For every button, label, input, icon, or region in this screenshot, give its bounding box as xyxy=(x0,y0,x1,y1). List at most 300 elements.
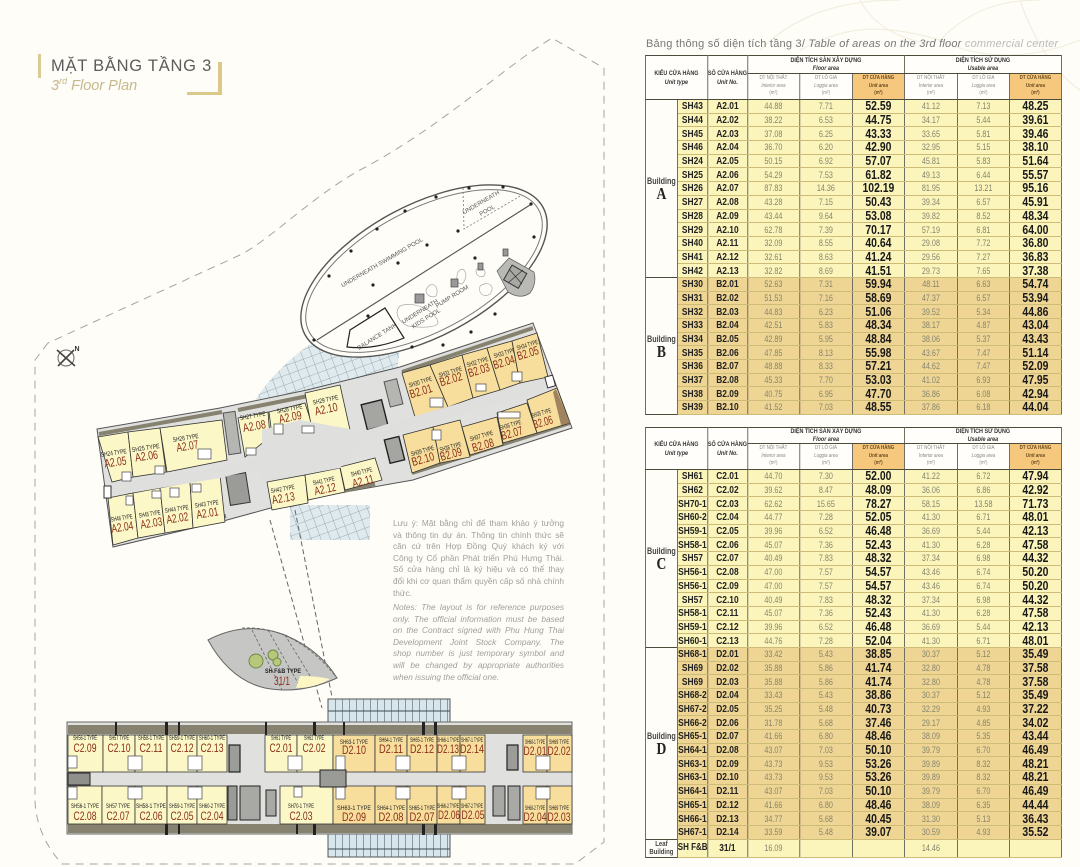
building B rows: 8.33 xyxy=(819,361,833,371)
building D rows: D2.11 xyxy=(716,785,738,797)
building A rows: 44.88 xyxy=(764,101,782,111)
building D rows: D2.10 xyxy=(716,771,739,783)
unit C2.10: SH57 TYPE xyxy=(109,735,129,742)
wing lobby xyxy=(262,420,362,482)
building D rows: 8.32 xyxy=(976,772,990,782)
building D rows: 5.68 xyxy=(819,814,833,824)
building B rows: SH32 xyxy=(682,306,703,318)
building A rows: 5.44 xyxy=(976,115,990,125)
building D rows: 34.77 xyxy=(764,814,782,824)
building B rows: 7.03 xyxy=(819,402,833,412)
building C rows: 6.52 xyxy=(819,526,833,536)
unit C2.12: SH59-1 TYPE xyxy=(169,735,195,742)
note text Vietnamese: Lưu ý: Mặt bằng chỉ để tham khảo ý tưởng xyxy=(393,518,564,528)
building B rows: 4.87 xyxy=(976,320,990,330)
unit D2.02: SH69 TYPE xyxy=(549,739,569,746)
building B rows: B2.06 xyxy=(716,347,739,359)
building A rows: 32.61 xyxy=(764,252,782,262)
unit A2.05 xyxy=(98,432,133,482)
building D rows: 7.03 xyxy=(819,786,833,796)
building D rows xyxy=(645,647,1061,839)
unit A2.04: A2.04 xyxy=(110,518,135,536)
building C rows: 58.15 xyxy=(922,499,940,509)
table header: Unit No. xyxy=(717,450,738,456)
table header: Loggia area xyxy=(972,83,995,89)
building B rows: 5.95 xyxy=(819,334,833,344)
building D rows: 5.48 xyxy=(819,827,833,837)
building D rows: SH65-1 xyxy=(678,799,707,811)
unit C2.05 xyxy=(167,786,197,824)
building C rows: 6.71 xyxy=(976,512,990,522)
unit A2.13: A2.13 xyxy=(271,489,296,507)
unit D2.08: D2.08 xyxy=(378,810,404,824)
note text English: on the Contract signed with Phu Hung Thai xyxy=(393,625,564,635)
building C rows: 7.83 xyxy=(819,595,833,605)
building C rows: 40.49 xyxy=(764,553,782,563)
unit C2.04: SH60-2 TYPE xyxy=(199,803,225,810)
compass icon: N xyxy=(74,346,80,353)
unit B2.03: SH32 TYPE xyxy=(466,356,489,369)
building D rows: D2.08 xyxy=(716,744,739,756)
building D rows: 5.12 xyxy=(976,690,990,700)
building A rows: SH43 xyxy=(682,100,703,112)
unit C2.08 xyxy=(68,786,102,824)
building B rows: B2.02 xyxy=(716,292,739,304)
building C rows: 40.49 xyxy=(764,595,782,605)
unit B2.04 xyxy=(487,341,520,390)
building D rows: 5.13 xyxy=(976,814,990,824)
building B rows: 36.86 xyxy=(922,389,940,399)
building A rows: 6.44 xyxy=(976,170,990,180)
unit D2.09: D2.09 xyxy=(342,810,366,824)
building C rows: C2.08 xyxy=(716,566,739,578)
leaf building row: Leaf Building xyxy=(649,839,673,856)
building D rows: 30.37 xyxy=(922,649,940,659)
building D rows: D2.01 xyxy=(716,648,739,660)
building C rows: 39.62 xyxy=(764,485,782,495)
building C rows: 13.58 xyxy=(974,499,992,509)
table header: Unit area xyxy=(1026,83,1045,89)
building B rows: SH39 xyxy=(682,401,703,413)
building D rows: 5.48 xyxy=(819,704,833,714)
building D rows: D2.06 xyxy=(716,717,739,729)
building D rows: D2.09 xyxy=(716,758,739,770)
wet rooms xyxy=(68,756,550,799)
unit D2.09 xyxy=(333,786,375,824)
unit C2.12: C2.12 xyxy=(170,741,194,755)
building D rows: D2.05 xyxy=(716,703,739,715)
unit B2.07: SH36 TYPE xyxy=(499,419,523,432)
building C rows: C2.01 xyxy=(716,470,739,482)
table header: Usable area xyxy=(968,64,998,72)
building B rows: B xyxy=(657,342,666,361)
building B rows: 45.33 xyxy=(764,375,782,385)
building B rows: 6.95 xyxy=(819,389,833,399)
unit D2.11: D2.11 xyxy=(379,742,403,756)
building A rows: 39.82 xyxy=(922,211,940,221)
building A rows: 7.27 xyxy=(976,252,990,262)
building A rows: SH27 xyxy=(682,196,703,208)
note text English: shop number is just temporary symbol and xyxy=(393,648,564,658)
table header xyxy=(654,428,1061,469)
building B rows: 6.23 xyxy=(819,307,833,317)
unit D2.06: D2.06 xyxy=(438,808,460,822)
unit D2.06 xyxy=(437,786,460,824)
building C rows: SH56-1 xyxy=(678,566,707,578)
unit A2.01 xyxy=(190,475,225,528)
title bracket left xyxy=(38,54,41,78)
building C rows: C2.06 xyxy=(716,539,739,551)
building B rows: B2.04 xyxy=(716,319,739,331)
building A rows: SH28 xyxy=(682,210,703,222)
building A rows: A2.03 xyxy=(716,128,739,140)
table header: DT CỬA HÀNG (m²) xyxy=(863,75,894,96)
building D rows: SH65-1 xyxy=(678,730,707,742)
building A rows: SH26 xyxy=(682,182,703,194)
unit A2.09 xyxy=(269,403,313,435)
building D rows: 39.79 xyxy=(922,786,940,796)
building C rows: 8.47 xyxy=(819,485,833,495)
unit D2.01: D2.01 xyxy=(524,744,547,758)
table header: Unit area xyxy=(1026,453,1045,459)
unit D2.10: D2.10 xyxy=(342,743,366,757)
unit D2.11: SH64-1 TYPE xyxy=(379,737,403,744)
wet rooms xyxy=(122,372,522,505)
building C rows: 36.69 xyxy=(922,622,940,632)
building D rows: D2.03 xyxy=(716,676,739,688)
building B rows: 7.47 xyxy=(976,348,990,358)
building C rows: 43.46 xyxy=(922,581,940,591)
building A rows: 39.34 xyxy=(922,197,940,207)
building A rows: 5.81 xyxy=(976,129,990,139)
table header: Unit area xyxy=(869,83,888,89)
unit B2.02: B2.02 xyxy=(438,369,464,389)
table heading: Bảng thông số diện tích tầng 3/ Table of areas on the 3rd floor commercial center xyxy=(646,38,1058,50)
unit D2.01 xyxy=(523,735,547,772)
building D rows: D2.07 xyxy=(716,730,739,742)
unit A2.02: A2.02 xyxy=(165,509,190,527)
building C rows: C2.11 xyxy=(716,607,738,619)
building C rows: C2.09 xyxy=(716,580,739,592)
unit D2.14 xyxy=(460,735,485,772)
unit A2.09: A2.09 xyxy=(278,408,303,426)
building C rows: SH59-1 xyxy=(678,525,707,537)
building D rows: Building xyxy=(647,731,676,741)
table header: Loggia area xyxy=(814,83,838,89)
balance tank xyxy=(347,308,404,348)
unit D2.14: SH67-1 TYPE xyxy=(461,737,483,744)
building C rows: 6.72 xyxy=(976,471,990,481)
unit C2.01: SH61 TYPE xyxy=(271,735,291,742)
leaf building row: 16.09 xyxy=(764,843,782,853)
building D rows: SH63-1 xyxy=(678,771,707,783)
building B rows: 37.86 xyxy=(922,402,940,412)
unit A2.07: SH26 TYPE xyxy=(172,433,200,444)
leaf F&B building xyxy=(208,628,337,690)
note text Vietnamese: và thông tin dự án. Thông tin chính thức sẽ xyxy=(393,530,564,540)
unit B2.01: B2.01 xyxy=(408,381,434,401)
unit C2.09: SH56-1 TYPE xyxy=(73,735,97,742)
building B rows: 7.47 xyxy=(976,361,990,371)
table: buildings C, D and leaf xyxy=(645,427,1062,858)
unit A2.10: A2.10 xyxy=(313,400,339,418)
table header: Unit area xyxy=(869,453,888,459)
building A rows: SH29 xyxy=(682,224,703,236)
building A rows: 57.19 xyxy=(922,225,940,235)
building D rows: D2.12 xyxy=(716,799,739,811)
building C rows: Building xyxy=(647,546,676,556)
unit C2.06: SH58-1 TYPE xyxy=(136,803,166,810)
building A rows: 32.95 xyxy=(922,142,940,152)
building D rows: SH63-1 xyxy=(678,758,707,770)
building A rows: 7.53 xyxy=(819,170,833,180)
unit A2.12: SH41 TYPE xyxy=(312,476,336,487)
building D rows: 7.03 xyxy=(819,745,833,755)
building C rows: 43.46 xyxy=(922,567,940,577)
building C rows: 7.57 xyxy=(819,567,833,577)
table header: DT LÔ GIA (m²) xyxy=(972,75,994,96)
building A rows: 13.21 xyxy=(974,183,992,193)
unit C2.03: C2.03 xyxy=(290,809,313,823)
unit C2.02 xyxy=(297,735,333,772)
building A rows: 7.15 xyxy=(819,197,833,207)
building C rows: 7.83 xyxy=(819,553,833,563)
unit D2.03 xyxy=(547,786,572,824)
title: English: 3rd Floor Plan xyxy=(51,76,137,94)
building D rows: D xyxy=(656,739,666,758)
table header: SỐ CỬA HÀNG xyxy=(708,70,747,76)
building B rows: 5.34 xyxy=(976,307,990,317)
building B rows: SH34 xyxy=(682,333,703,345)
building B rows: B2.08 xyxy=(716,374,739,386)
building C rows: 39.96 xyxy=(764,526,782,536)
unit D2.04: SH68-2 TYPE xyxy=(525,805,545,812)
note text English: Notes: The layout is for reference purposes xyxy=(393,602,564,612)
building A rows: 6.20 xyxy=(819,142,833,152)
table header: DT NỘI THẤT (m²) xyxy=(759,445,787,466)
unit B2.10 xyxy=(403,427,440,473)
building D rows: 38.09 xyxy=(922,800,940,810)
unit D2.10: SH63-1 TYPE xyxy=(340,739,368,746)
building C rows: 6.52 xyxy=(819,622,833,632)
building D rows: 33.42 xyxy=(764,649,782,659)
building A rows: 9.64 xyxy=(819,211,833,221)
building A rows: A2.08 xyxy=(716,196,739,208)
building C rows: 6.74 xyxy=(976,567,990,577)
table header: Floor area xyxy=(813,64,839,72)
building C rows: SH60-2 xyxy=(678,511,707,523)
building A rows: 6.92 xyxy=(819,156,833,166)
building A rows: 6.57 xyxy=(976,197,990,207)
unit B2.09: SH38 TYPE xyxy=(439,441,463,454)
building D rows: 41.66 xyxy=(764,731,782,741)
leaf building row: 14.46 xyxy=(922,843,940,853)
building B rows: B2.09 xyxy=(716,388,739,400)
unit C2.13 xyxy=(197,735,227,772)
unit B2.05 xyxy=(512,333,548,383)
building B rows: 7.70 xyxy=(819,375,833,385)
building A rows: 8.63 xyxy=(819,252,833,262)
unit D2.02 xyxy=(547,735,572,772)
unit B2.10: B2.10 xyxy=(410,449,436,469)
building B rows: Building xyxy=(647,334,676,344)
rooftop ellipse plan: UNDERNEATH xyxy=(401,299,440,326)
building C rows: C2.03 xyxy=(716,498,739,510)
building D rows: 43.07 xyxy=(764,745,782,755)
building D rows: SH68-2 xyxy=(678,689,707,701)
leaf building row: SH F&B xyxy=(678,842,707,853)
building C rows: C2.12 xyxy=(716,621,739,633)
unit C2.06 xyxy=(135,786,167,824)
unit D2.05: SH67-2 TYPE xyxy=(461,803,483,810)
building C rows: 41.30 xyxy=(922,540,940,550)
table header: Interior area xyxy=(761,83,785,89)
unit D2.07: D2.07 xyxy=(410,810,435,824)
building C rows: C2.04 xyxy=(716,511,739,523)
building B rows: 51.53 xyxy=(764,293,782,303)
building D rows: 29.17 xyxy=(922,718,940,728)
building C rows: 62.62 xyxy=(764,499,782,509)
building C rows: 6.98 xyxy=(976,553,990,563)
building A rows: A2.02 xyxy=(716,114,739,126)
building A rows: 29.73 xyxy=(922,266,940,276)
leaf building row xyxy=(649,839,1061,857)
building A rows: SH40 xyxy=(682,237,703,249)
building A rows: 6.81 xyxy=(976,225,990,235)
unit A2.01: SH43 TYPE xyxy=(194,499,220,510)
connecting bridge dashed lines xyxy=(270,510,332,708)
building C rows: 41.30 xyxy=(922,608,940,618)
building D rows: 6.35 xyxy=(976,800,990,810)
building B rows: 42.89 xyxy=(764,334,782,344)
building D rows: 43.73 xyxy=(764,759,782,769)
building D rows: SH64-1 xyxy=(678,744,707,756)
building C rows: 7.57 xyxy=(819,581,833,591)
unit B2.10: SH39 TYPE xyxy=(410,445,436,458)
building D rows: D2.04 xyxy=(716,689,739,701)
building D rows: D2.02 xyxy=(716,662,739,674)
table header: Unit No. xyxy=(717,78,738,86)
building B rows: 41.02 xyxy=(922,375,940,385)
building D rows: 31.78 xyxy=(764,718,782,728)
building A rows: 54.29 xyxy=(764,170,782,180)
building B rows: 7.16 xyxy=(819,293,833,303)
table header xyxy=(654,56,1061,99)
building A rows: SH45 xyxy=(682,128,703,140)
leaf building row: 31/1 xyxy=(719,842,736,854)
building D rows: 30.59 xyxy=(922,827,940,837)
background leaf ornament xyxy=(760,0,1080,90)
building C rows: 44.76 xyxy=(764,636,782,646)
unit A2.02 xyxy=(160,482,193,533)
table header: DT LÔ GIA (m²) xyxy=(972,445,994,466)
building C rows: 7.36 xyxy=(819,540,833,550)
unit D2.12: D2.12 xyxy=(410,742,434,756)
building D rows: 4.85 xyxy=(976,718,990,728)
wing floor shell xyxy=(97,323,572,547)
wing end stairs xyxy=(104,486,111,498)
building B rows: SH38 xyxy=(682,388,703,400)
building A rows: 33.65 xyxy=(922,129,940,139)
building C rows: 41.22 xyxy=(922,471,940,481)
unit D2.05: D2.05 xyxy=(462,808,485,822)
building A rows: A2.13 xyxy=(716,265,739,277)
unit A2.08 xyxy=(238,411,270,457)
block floor shell xyxy=(67,722,572,834)
building A rows: 8.55 xyxy=(819,238,833,248)
note text English: will be changed by appropriate authorities xyxy=(393,660,564,670)
building D rows: 4.93 xyxy=(976,704,990,714)
building B rows: 39.52 xyxy=(922,307,940,317)
building C rows: 44.70 xyxy=(764,471,782,481)
building A rows: A2.07 xyxy=(716,182,739,194)
rooftop ellipse plan: UNDERNEATH xyxy=(462,190,501,216)
building B rows: 6.18 xyxy=(976,402,990,412)
title bracket right xyxy=(187,62,222,95)
unit A2.11: SH40 TYPE xyxy=(350,466,374,479)
building D rows: 5.68 xyxy=(819,718,833,728)
building A rows: A2.12 xyxy=(716,251,739,263)
table header: Loggia area xyxy=(814,453,838,459)
table header: DT NỘI THẤT (m²) xyxy=(917,445,945,466)
unit C2.02: C2.02 xyxy=(302,741,326,755)
unit D2.14: D2.14 xyxy=(460,742,484,756)
building A rows: 7.72 xyxy=(976,238,990,248)
building C rows: SH56-1 xyxy=(678,580,707,592)
unit A2.10 xyxy=(305,385,350,440)
building B rows: 6.63 xyxy=(976,279,990,289)
unit B2.05: SH34 TYPE xyxy=(516,339,539,352)
building C rows: 44.77 xyxy=(764,512,782,522)
title block xyxy=(38,54,222,95)
building A rows: 8.52 xyxy=(976,211,990,221)
unit B2.09: B2.09 xyxy=(438,444,464,464)
building D rows: SH66-2 xyxy=(678,717,707,729)
unit B2.02 xyxy=(430,355,473,407)
building D rows: 33.59 xyxy=(764,827,782,837)
building D rows: 30.37 xyxy=(922,690,940,700)
unit A2.03: A2.03 xyxy=(139,514,164,532)
building D rows: 43.07 xyxy=(764,786,782,796)
floor plan drawing xyxy=(34,38,604,864)
table header: DT NỘI THẤT (m²) xyxy=(917,75,945,96)
unit B2.04: SH33 TYPE xyxy=(493,347,516,360)
note text Vietnamese: thức. xyxy=(393,588,412,598)
unit D2.12: SH65-1 TYPE xyxy=(410,737,434,744)
table header: Floor area xyxy=(813,436,839,442)
unit B2.07: B2.07 xyxy=(499,423,525,443)
unit A2.06: SH25 TYPE xyxy=(131,443,161,454)
table header: Interior area xyxy=(919,453,943,459)
core lifts xyxy=(226,473,250,505)
building D rows: 5.12 xyxy=(976,649,990,659)
building A rows: 34.17 xyxy=(922,115,940,125)
balconies xyxy=(99,328,570,541)
building B rows: 6.08 xyxy=(976,389,990,399)
building B rows: 44.62 xyxy=(922,361,940,371)
building D rows: 35.25 xyxy=(764,704,782,714)
building A rows: 32.82 xyxy=(764,266,782,276)
unit B2.01 xyxy=(402,365,448,417)
building B rows: 43.67 xyxy=(922,348,940,358)
unit C2.08: SH56-1 TYPE xyxy=(71,803,99,810)
building D rows: 39.79 xyxy=(922,745,940,755)
unit D2.03: D2.03 xyxy=(548,810,571,824)
unit A2.13: SH42 TYPE xyxy=(270,484,296,495)
building A rows: 50.15 xyxy=(764,156,782,166)
building B rows: 47.85 xyxy=(764,348,782,358)
unit A2.06 xyxy=(128,428,166,477)
